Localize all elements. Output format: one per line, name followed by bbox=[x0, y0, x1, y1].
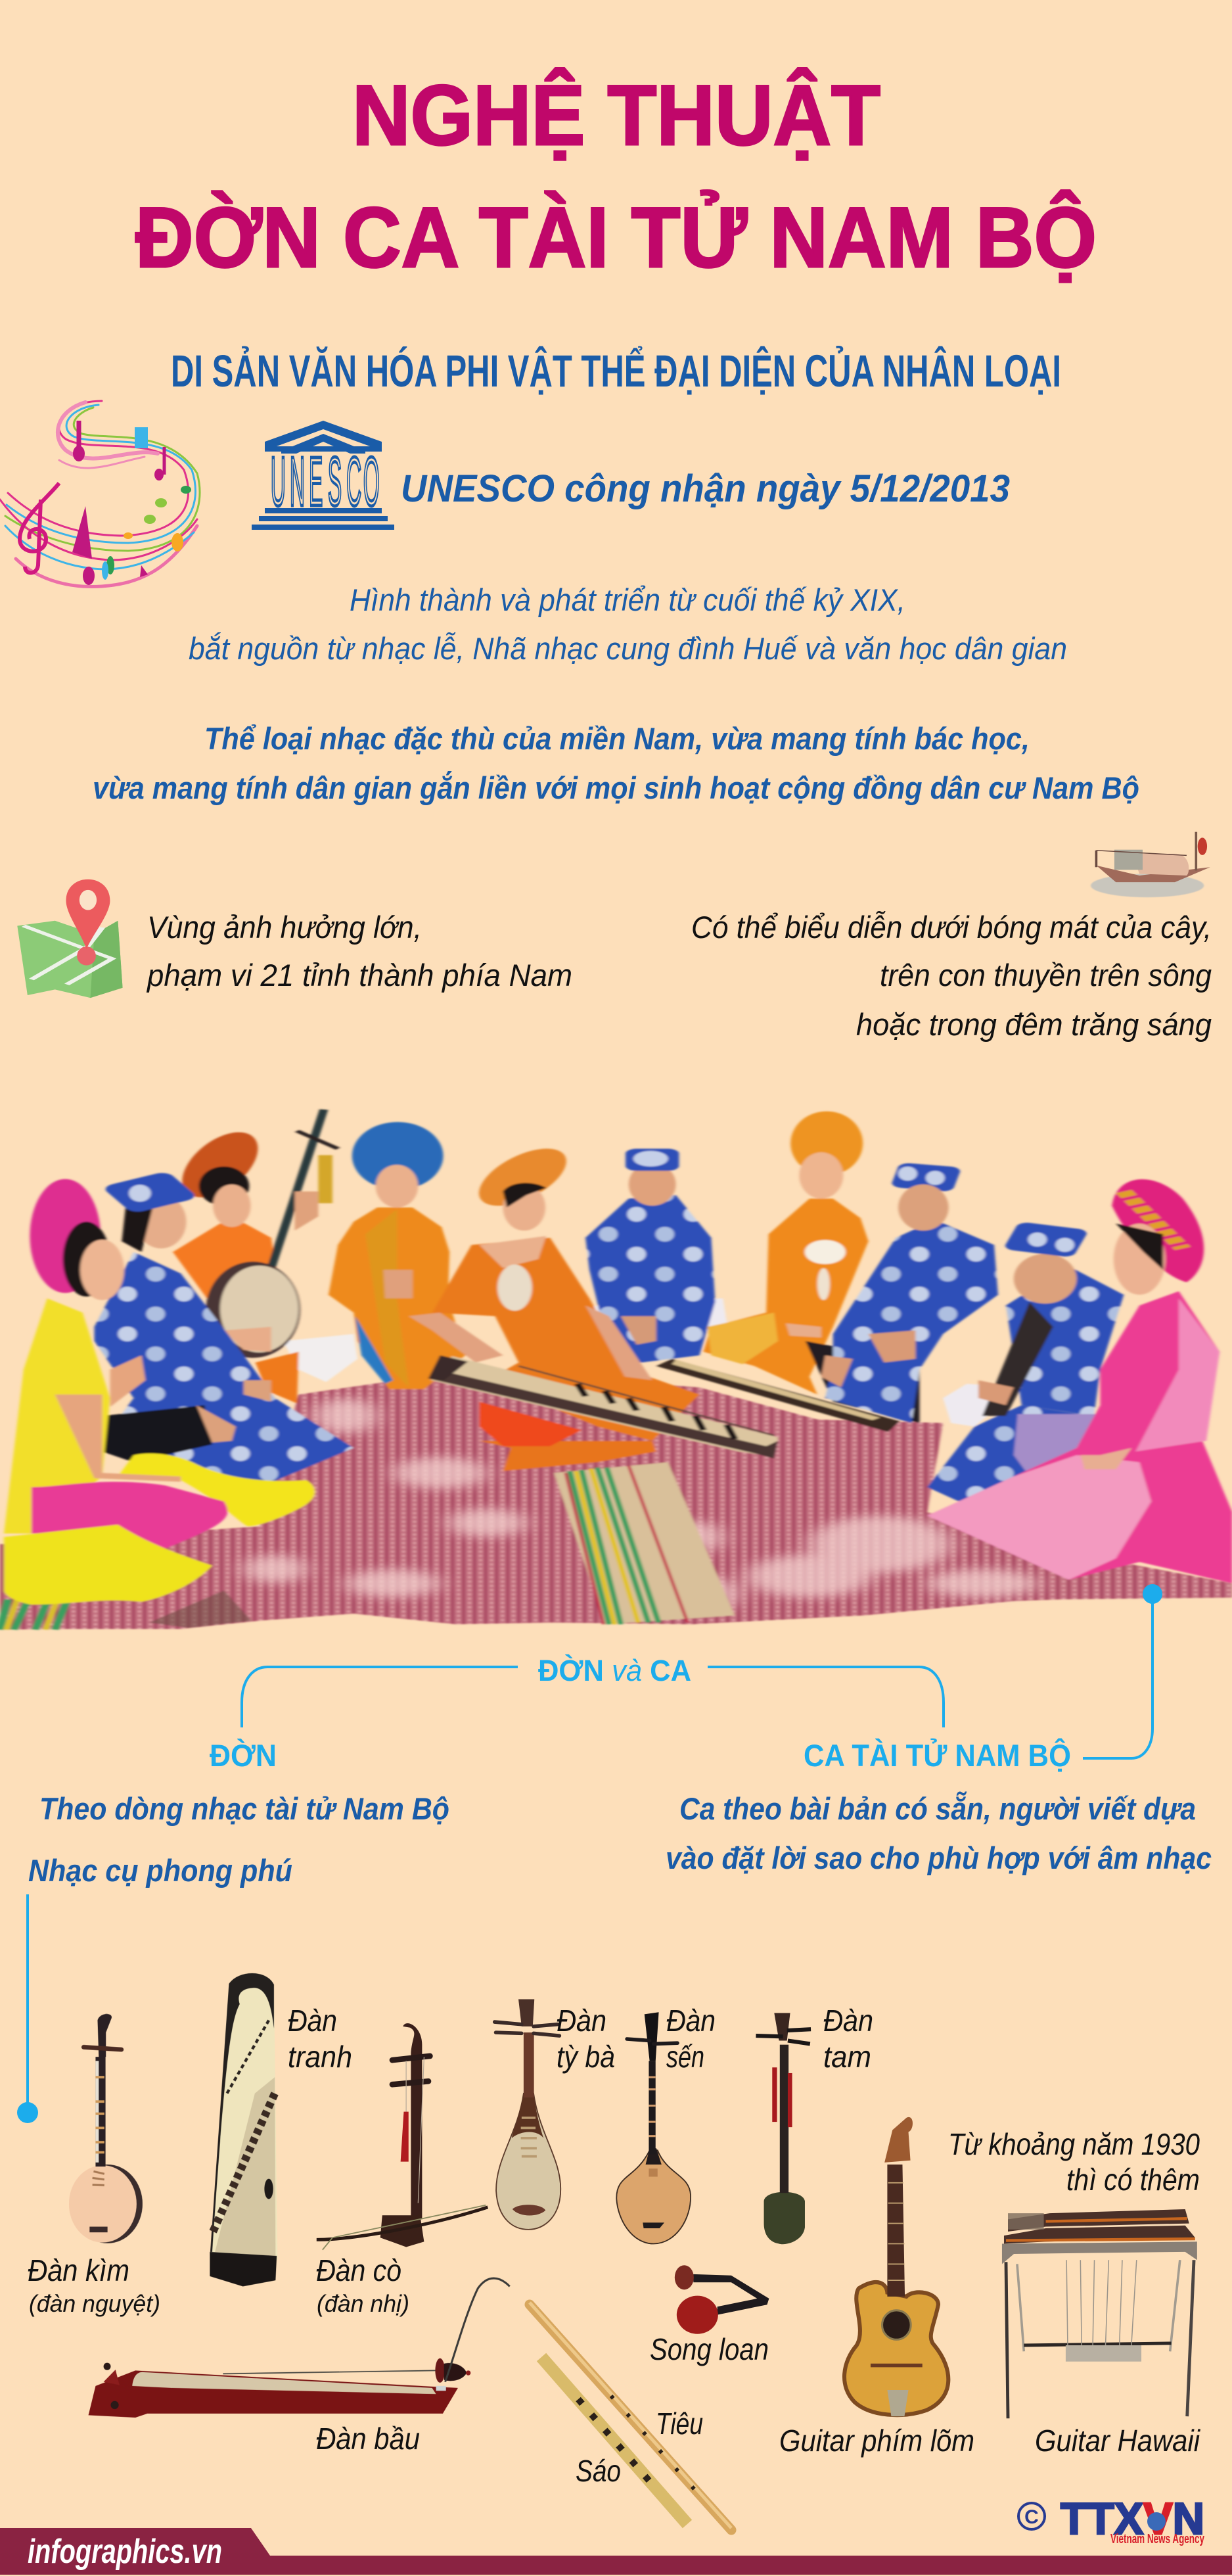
woven mat bbox=[0, 1370, 1232, 1629]
logo: copyright: C bbox=[1024, 2506, 1039, 2528]
instrument labels: tỳ bà bbox=[557, 2040, 615, 2074]
man in blue on the right bbox=[806, 1162, 998, 1423]
footer bar bbox=[0, 2528, 1232, 2575]
text block: performance settings: Có thể biểu diễn dưới bóng mát của cây, bbox=[691, 910, 1212, 945]
instrument labels: Song loan bbox=[650, 2332, 769, 2366]
instrument labels: Đàn cò bbox=[316, 2253, 401, 2287]
instrument labels: Đàn bbox=[666, 2003, 716, 2038]
text block: genre: vừa mang tính dân gian gắn liền với mọi sinh hoạt cộng đồng dân cư Nam Bộ bbox=[93, 770, 1139, 805]
text block: influence region: phạm vi 21 tỉnh thành phía Nam bbox=[146, 958, 572, 993]
icon: map with pin bbox=[17, 879, 123, 998]
instrument labels: Từ khoảng năm 1930 bbox=[948, 2127, 1200, 2161]
text block: origin: Hình thành và phát triển từ cuối thế kỷ XIX, bbox=[350, 582, 905, 617]
connector: instruments bbox=[17, 1894, 38, 2123]
icon: tiêu flute bbox=[530, 2303, 731, 2530]
photo: musicians on a mat bbox=[0, 1110, 1232, 1629]
text block: influence region: Vùng ảnh hưởng lớn, bbox=[147, 910, 422, 945]
instrument labels: tam bbox=[823, 2040, 871, 2074]
text: Đờn description: Nhạc cụ phong phú bbox=[28, 1853, 292, 1888]
icon: boat bbox=[1091, 832, 1210, 897]
instrument labels: Đàn bbox=[823, 2003, 873, 2038]
instrument labels: Đàn kìm bbox=[28, 2253, 129, 2287]
text block: influence region bbox=[146, 910, 572, 993]
text block: origin: bắt nguồn từ nhạc lễ, Nhã nhạc cung đình Huế và văn học dân gian bbox=[189, 631, 1067, 666]
heading: Đờn: ĐỜN bbox=[210, 1738, 277, 1773]
text block: genre bbox=[93, 721, 1139, 805]
icon: đàn tỳ bà bbox=[495, 1999, 560, 2230]
heading: Ca tài tử Nam Bộ: CA TÀI TỬ NAM BỘ bbox=[804, 1738, 1071, 1773]
text block: performance settings: hoặc trong đêm trăng sáng bbox=[856, 1007, 1212, 1042]
logo: TTXVN: TTXVN bbox=[1061, 2494, 1204, 2544]
logo: copyright bbox=[1018, 2503, 1045, 2529]
central woman with zither bbox=[409, 1142, 778, 1471]
woman in orange with lotus dress bbox=[703, 1112, 869, 1395]
heading: Đờn và Ca: ĐỜN và CA bbox=[538, 1654, 691, 1687]
icon: song loan bbox=[675, 2265, 769, 2334]
text block: origin bbox=[189, 582, 1067, 666]
man in blue at the back bbox=[566, 1149, 727, 1366]
title: ĐỜN CA TÀI TỬ NAM BỘ bbox=[135, 189, 1097, 285]
instrument labels: thì có thêm bbox=[1066, 2163, 1200, 2197]
text block: genre: Thể loại nhạc đặc thù của miền Nam, vừa mang tính bác học, bbox=[204, 721, 1030, 756]
icon: đàn tam bbox=[756, 2013, 811, 2244]
instrument labels: Sáo bbox=[576, 2454, 621, 2488]
instrument labels: (đàn nguyệt) bbox=[29, 2290, 160, 2317]
woman in orange with blue hat bbox=[329, 1122, 465, 1389]
text: Ca description bbox=[666, 1791, 1212, 1875]
text: Đờn description bbox=[28, 1791, 449, 1888]
icon: đàn bầu bbox=[89, 2278, 510, 2418]
icon: music swirl bbox=[0, 401, 200, 587]
instrument labels: Đàn bầu bbox=[316, 2422, 420, 2456]
instrument labels: (đàn nhị) bbox=[317, 2290, 409, 2317]
man in blue playing lute bbox=[927, 1222, 1124, 1512]
icon: guitar Hawaii bbox=[1002, 2209, 1197, 2418]
woman in orange with moon lute bbox=[167, 1110, 357, 1403]
icon: đàn cò bbox=[317, 2023, 488, 2250]
woman in pink bbox=[927, 1179, 1232, 1583]
icon: UNESCO logo: UNESCO bbox=[271, 442, 380, 521]
text block: performance settings bbox=[691, 910, 1212, 1042]
title bbox=[135, 67, 1097, 285]
icon: music notes bbox=[20, 421, 191, 585]
instrument labels: sến bbox=[666, 2040, 704, 2074]
text: Đờn description: Theo dòng nhạc tài tử Nam Bộ bbox=[39, 1791, 449, 1826]
instrument labels: Tiêu bbox=[656, 2406, 703, 2441]
icon: đàn kìm bbox=[69, 2014, 143, 2243]
connector: photo to Ca tài tử bbox=[1083, 1584, 1162, 1758]
instrument labels: Đàn bbox=[288, 2003, 337, 2038]
UNESCO recognition text: UNESCO công nhận ngày 5/12/2013 bbox=[401, 467, 1010, 510]
icon: guitar phím lõm bbox=[844, 2117, 948, 2416]
instrument labels: tranh bbox=[288, 2040, 352, 2074]
icon: đàn sến bbox=[616, 2012, 691, 2244]
instrument labels: Guitar Hawaii bbox=[1035, 2424, 1201, 2458]
instrument labels bbox=[28, 2003, 1201, 2488]
bracket: Đờn và Ca bbox=[242, 1667, 944, 1727]
icon: UNESCO logo bbox=[252, 421, 394, 530]
text block: performance settings: trên con thuyền trên sông bbox=[880, 958, 1212, 993]
title: NGHỆ THUẬT bbox=[352, 67, 880, 163]
man in blue on the left bbox=[95, 1171, 354, 1491]
woman in yellow bbox=[4, 1179, 315, 1604]
second zither bbox=[656, 1359, 900, 1432]
instrument labels: Đàn bbox=[557, 2003, 606, 2038]
instrument labels: Guitar phím lõm bbox=[779, 2424, 974, 2458]
icon: đàn tranh bbox=[210, 1973, 277, 2286]
footer: website: infographics.vn bbox=[28, 2533, 222, 2571]
icon: sáo flute bbox=[541, 2357, 687, 2524]
